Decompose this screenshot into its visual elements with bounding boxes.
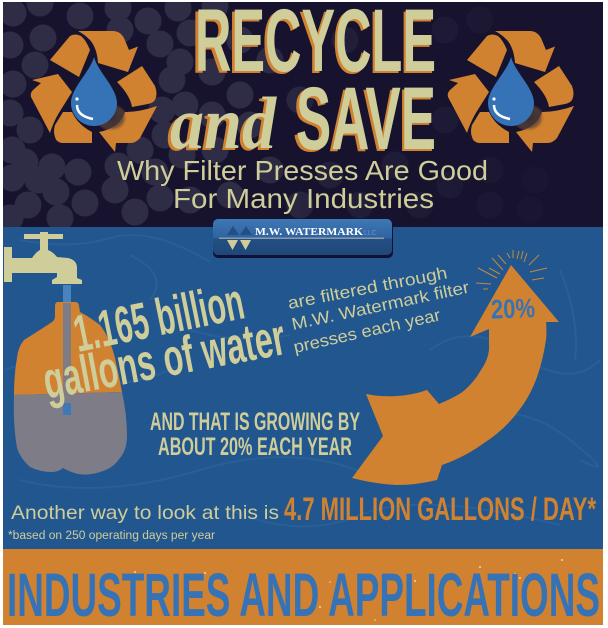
blue water panel — [3, 227, 603, 549]
logo badge — [213, 219, 393, 258]
headline: 1.165 billion gallons of water: gallons of water — [38, 308, 290, 411]
headline: 1.165 billion gallons of water — [38, 273, 290, 411]
title: SAVE — [296, 68, 436, 168]
title: SAVE — [293, 70, 434, 170]
text: filtered through — [286, 263, 471, 357]
subtitle: For Many Industries — [173, 183, 434, 214]
text: filtered through: M.W. Watermark filter — [290, 278, 471, 334]
icon: recycle symbol with water drop, right — [448, 31, 574, 152]
title: and — [167, 85, 274, 167]
text: growth statement: ABOUT 20% EACH YEAR — [158, 433, 352, 461]
title — [167, 0, 436, 170]
footnote: *based on 250 operating days per year — [8, 530, 215, 542]
text: filtered through: are filtered through — [286, 263, 449, 313]
subtitle: Why Filter Presses Are Good — [117, 155, 488, 186]
logo badge: M.W. WATERMARK — [255, 226, 363, 238]
header background panel — [0, 0, 603, 232]
icon: faucet — [4, 232, 82, 284]
icon: water stream — [63, 285, 71, 417]
icon: jug filled with orange and grey — [14, 302, 127, 475]
text: filtered through: presses each year — [292, 305, 443, 357]
orange banner — [3, 549, 603, 625]
icon: growth arrow — [352, 265, 559, 485]
label: 20%: 20% — [490, 293, 535, 325]
headline: 1.165 billion gallons of water: 1.165 billion — [69, 273, 249, 364]
logo badge: LLC — [364, 230, 377, 237]
text: growth statement — [150, 408, 360, 461]
icon: burst rays — [476, 250, 547, 289]
title: and — [170, 83, 277, 165]
text: another way: Another way to look at this is — [11, 502, 279, 524]
text: growth statement: AND THAT IS GROWING BY — [150, 408, 360, 436]
subtitle — [117, 155, 488, 214]
icon: recycle symbol with water drop, left — [31, 31, 157, 152]
